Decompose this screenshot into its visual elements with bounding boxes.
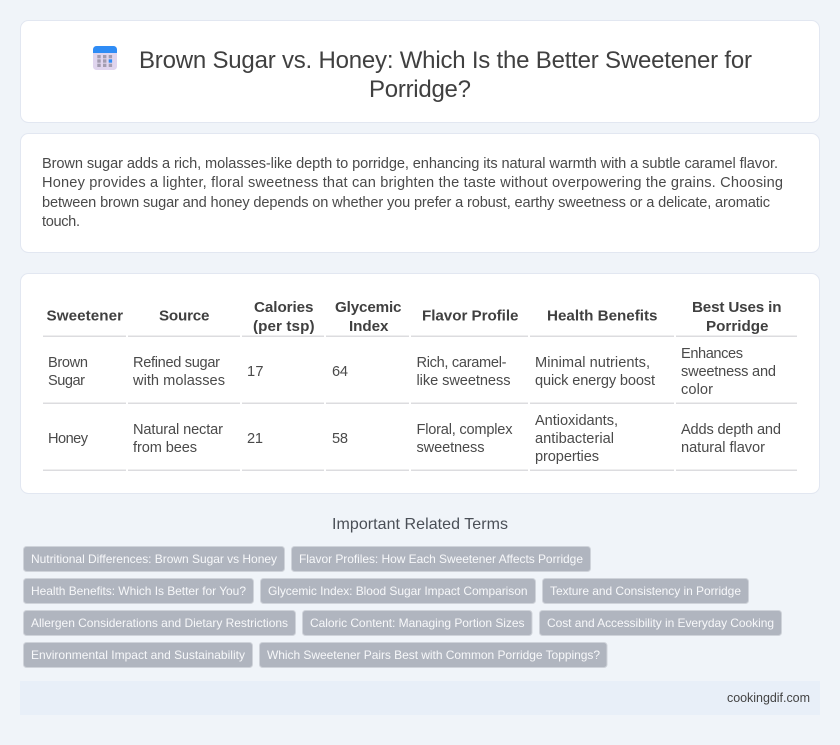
table header: Calories: [254, 299, 314, 316]
tag: [24, 610, 296, 636]
table row: brown sugar: color: [681, 382, 713, 398]
tag: Caloric Content: Managing Portion Sizes: [310, 616, 524, 630]
table row: brown sugar: Sugar: [48, 373, 85, 389]
table row: brown sugar: 64: [332, 364, 348, 380]
tag: [260, 642, 607, 668]
table header: Flavor Profile: [422, 308, 518, 324]
title text: Porridge?: [369, 76, 471, 103]
table row: brown sugar: 17: [247, 364, 264, 380]
table rules: [43, 336, 797, 471]
table row: honey: [48, 413, 781, 465]
intro paragraph: Brown sugar adds a rich, molasses-like depth to porridge, enhancing its natural warmth with a subtle caramel flavor.: [42, 156, 778, 172]
table row: brown sugar: Refined sugar: [133, 355, 220, 371]
table row: honey: 21: [247, 431, 263, 447]
tag: Health Benefits: Which Is Better for You?: [31, 584, 246, 598]
table row: honey: antibacterial: [535, 431, 614, 447]
table header: Glycemic: [335, 299, 402, 316]
tag: [24, 642, 252, 668]
tag: Allergen Considerations and Dietary Restrictions: [31, 616, 288, 630]
table row: brown sugar: Minimal nutrients,: [535, 355, 650, 371]
table row: honey: from bees: [133, 440, 197, 456]
table row: honey: 58: [332, 431, 348, 447]
table row: honey: properties: [535, 449, 599, 465]
table row: honey: natural flavor: [681, 440, 765, 456]
tag: Glycemic Index: Blood Sugar Impact Comparison: [268, 584, 528, 598]
tag: Which Sweetener Pairs Best with Common Porridge Toppings?: [267, 648, 600, 662]
icon: calendar: [93, 46, 117, 70]
tag: [24, 546, 284, 572]
table header: Source: [159, 308, 210, 324]
table row: brown sugar: Brown: [48, 355, 88, 371]
table row: honey: Adds depth and: [681, 422, 781, 438]
table header: [46, 299, 782, 335]
table row: honey: Honey: [48, 431, 89, 447]
tag: [542, 578, 748, 604]
table row: honey: Natural nectar: [133, 422, 223, 438]
tag: Cost and Accessibility in Everyday Cooking: [547, 616, 774, 630]
tag: [292, 546, 590, 572]
table header: Index: [349, 318, 389, 335]
tag: Environmental Impact and Sustainability: [31, 648, 245, 662]
panel: title: [20, 20, 820, 122]
table row: brown sugar: [48, 346, 776, 398]
footer: [20, 681, 820, 715]
footer credit: cookingdif.com: [727, 691, 810, 705]
table header: (per tsp): [253, 318, 314, 335]
heading: related terms: Important Related Terms: [332, 516, 508, 533]
table row: honey: Antioxidants,: [535, 413, 618, 429]
intro paragraph: between brown sugar and honey depends on whether you prefer a robust, earthy sweetness or a delicate, aromatic: [42, 195, 770, 211]
table header: Porridge: [706, 318, 768, 335]
intro paragraph: touch.: [42, 214, 80, 230]
tag: Flavor Profiles: How Each Sweetener Affects Porridge: [299, 552, 583, 566]
table header: Best Uses in: [692, 299, 782, 316]
table row: brown sugar: like sweetness: [416, 373, 510, 389]
tag: Nutritional Differences: Brown Sugar vs Honey: [31, 552, 277, 566]
table row: honey: sweetness: [416, 440, 484, 456]
table row: brown sugar: Enhances: [681, 346, 743, 362]
tag: Texture and Consistency in Porridge: [550, 584, 741, 598]
tag: [540, 610, 782, 636]
table header: Health Benefits: [547, 308, 658, 324]
tag: [260, 578, 536, 604]
panel: comparison table: [20, 274, 820, 494]
table row: brown sugar: with molasses: [132, 373, 225, 389]
table row: brown sugar: quick energy boost: [535, 373, 655, 389]
intro paragraph: Honey provides a lighter, floral sweetness that can brighten the taste without overpowering the grains. Choosing: [42, 175, 783, 191]
related term tags: [24, 546, 782, 668]
table row: brown sugar: sweetness and: [681, 364, 776, 380]
title text: Brown Sugar vs. Honey: Which Is the Better Sweetener for: [139, 47, 752, 74]
panel: introduction: [20, 134, 820, 252]
tag: [24, 578, 254, 604]
table row: honey: Floral, complex: [416, 422, 513, 438]
table header: Sweetener: [46, 308, 123, 324]
table row: brown sugar: Rich, caramel-: [416, 355, 507, 371]
tag: [302, 610, 532, 636]
